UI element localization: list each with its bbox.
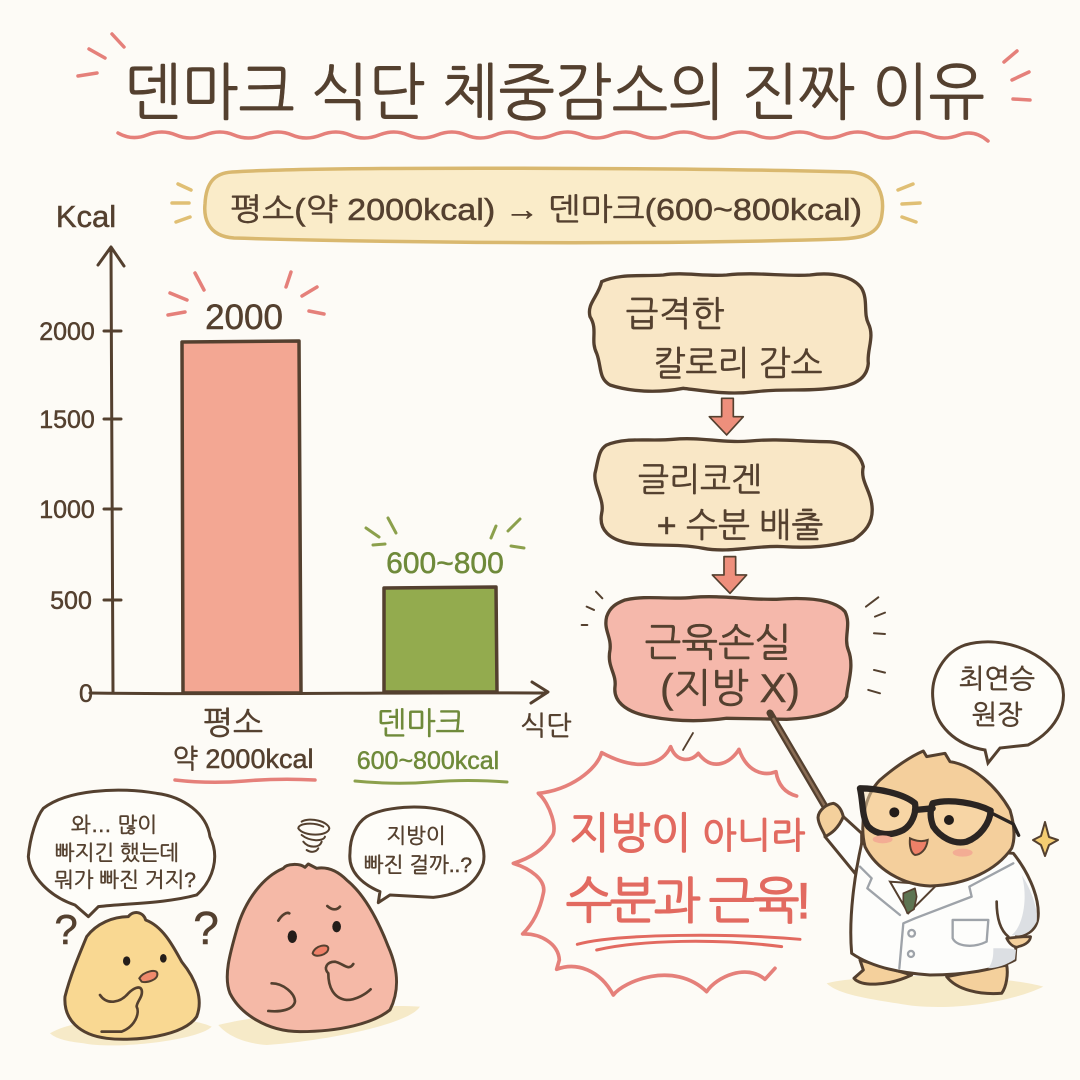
lab coat <box>851 843 1038 975</box>
x axis label: normal: 평소 <box>203 705 263 741</box>
speech bubble: chick: 빠지긴 했는데 <box>55 842 179 865</box>
icon: sparkle <box>1033 822 1058 856</box>
bar: normal diet <box>168 272 324 693</box>
flow step 2: 글리코겐 <box>638 461 762 498</box>
subtitle banner <box>172 168 920 243</box>
x axis label: Denmark <box>355 706 507 783</box>
raised arm and hand <box>818 803 862 873</box>
coat details <box>860 863 1013 968</box>
pointer stick <box>770 713 830 815</box>
x axis label: normal: 약 2000kcal <box>173 744 313 774</box>
eyes <box>889 807 899 817</box>
speech bubble: doctor name: 원장 <box>972 700 1022 730</box>
y axis label: Kcal <box>56 199 116 234</box>
bar: Denmark diet: 600~800 <box>386 547 504 580</box>
speech bubble: chick <box>28 790 215 917</box>
flow step 3: muscle loss <box>582 592 885 721</box>
callout burst: 지방이 아니라 <box>569 810 805 858</box>
y axis ticks <box>104 331 121 600</box>
flow step 1 <box>589 274 871 393</box>
flow chart <box>582 274 885 721</box>
feet <box>854 960 1007 994</box>
y axis values: 1500 <box>39 406 95 434</box>
y axis values: 500 <box>50 587 92 615</box>
glasses <box>860 788 991 842</box>
pink character <box>218 864 420 1045</box>
speech bubble: doctor name <box>933 642 1063 763</box>
arrow 2 <box>712 557 747 593</box>
speech bubble: chick: 뭐가 빠진 거지? <box>54 869 196 892</box>
chick character <box>50 913 212 1045</box>
flow step 2 <box>595 439 872 550</box>
icons: question marks: ? <box>193 902 219 954</box>
speech bubble: pink character: 빠진 걸까..? <box>364 854 472 877</box>
bar: Denmark diet <box>366 518 524 692</box>
axes <box>90 247 548 703</box>
hand at side <box>1007 937 1031 947</box>
speech bubble: pink character <box>350 807 484 903</box>
y axis values: 0 <box>79 680 93 708</box>
speech bubble: doctor name: 최연승 <box>959 664 1035 694</box>
bar: normal diet: 2000 <box>205 298 283 337</box>
x axis label: Denmark: 600~800kcal <box>357 747 499 775</box>
shirt and tie <box>890 882 937 913</box>
icons: question marks: ? <box>54 906 78 953</box>
speech bubble: pink character: 지방이 <box>386 825 446 848</box>
speech bubble: chick: 와… 많이 <box>71 814 157 837</box>
flow step 1: 칼로리 감소 <box>653 345 823 383</box>
small tick above burst <box>683 733 693 750</box>
flow step 1: 급격한 <box>626 295 724 334</box>
bar chart <box>39 199 571 783</box>
coat shading <box>988 875 1037 968</box>
x axis label: normal <box>173 705 315 782</box>
arrow 1 <box>709 398 743 435</box>
title <box>78 34 1030 141</box>
flow step 3: muscle loss: (지방 X) <box>660 667 800 711</box>
doctor character <box>818 751 1043 1007</box>
y axis values <box>39 318 95 708</box>
y axis values: 1000 <box>39 496 95 524</box>
head <box>863 751 1014 886</box>
x axis title: 식단 <box>521 711 571 741</box>
title: 덴마크 식단 체중감소의 진짜 이유 <box>125 59 985 128</box>
mouth <box>910 838 928 855</box>
ground shadow <box>827 976 1043 1007</box>
y axis values: 2000 <box>39 318 95 346</box>
flow step 2: + 수분 배출 <box>657 507 823 545</box>
flow step 3: muscle loss: 근육손실 <box>645 622 791 665</box>
icons: question marks <box>54 902 219 954</box>
callout burst <box>513 747 810 995</box>
subtitle banner: 평소(약 2000kcal) → 덴마크(600~800kcal) <box>230 192 862 227</box>
dizzy swirl icon <box>298 820 329 852</box>
x axis label: Denmark: 덴마크 <box>377 706 465 741</box>
callout burst: 수분과 근육! <box>566 873 810 929</box>
cheeks <box>873 835 893 843</box>
